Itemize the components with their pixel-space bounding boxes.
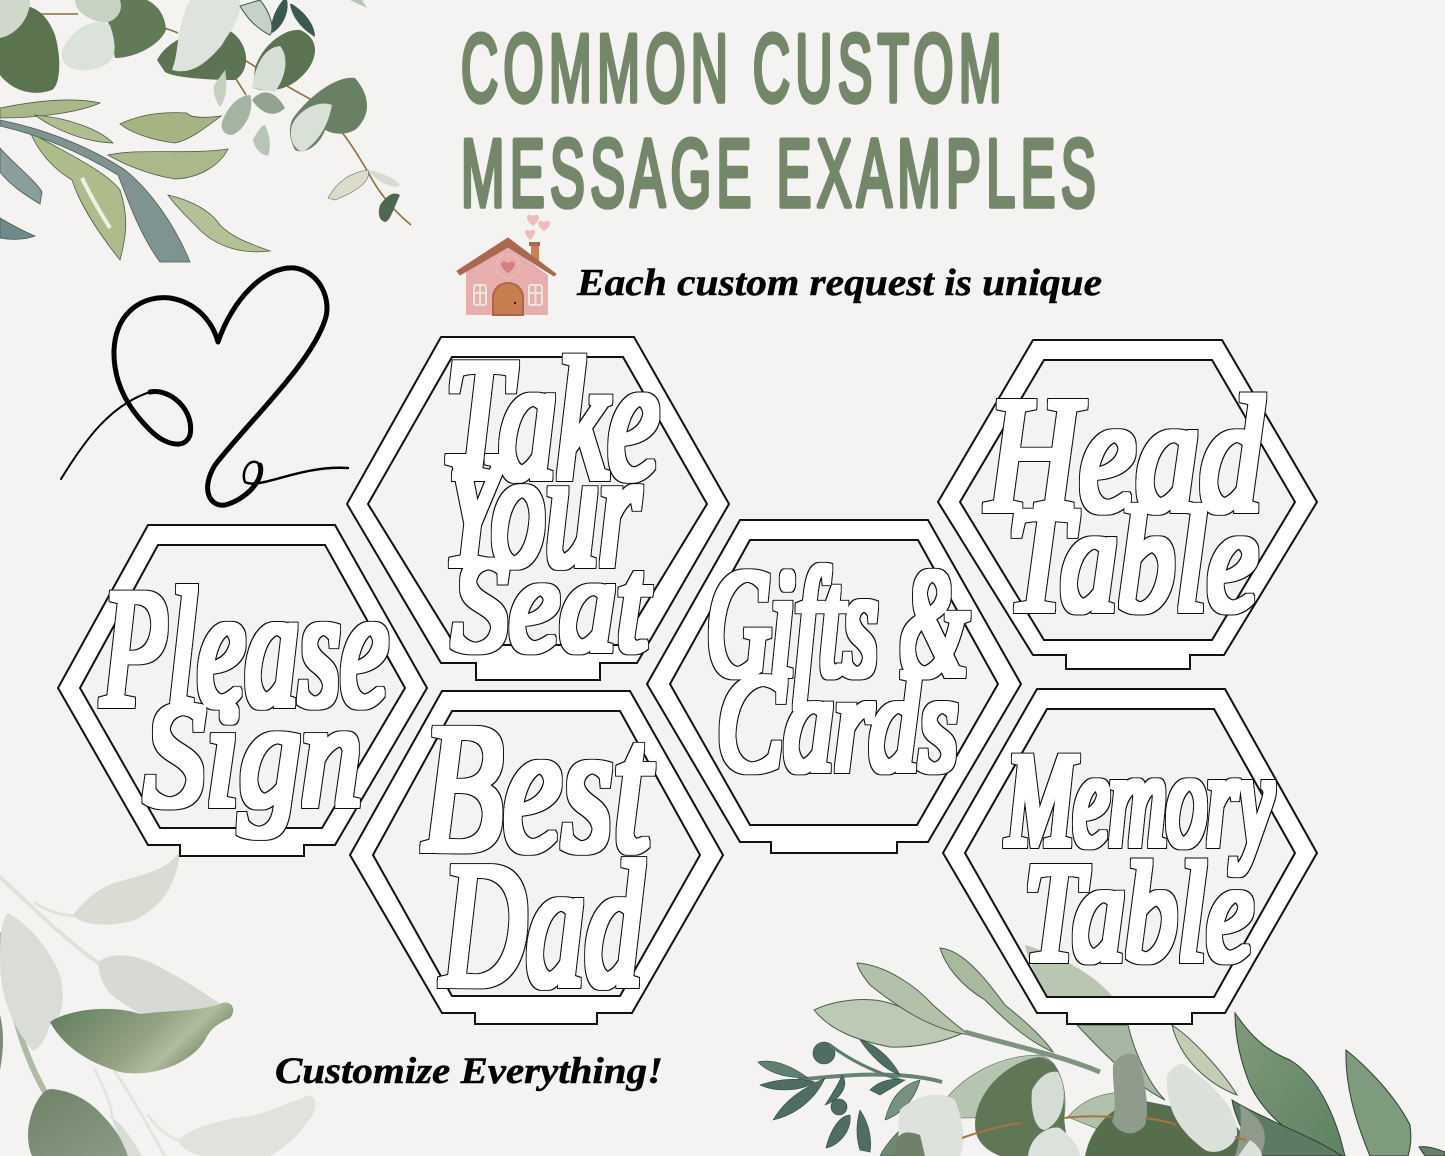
- script message: Head: [985, 363, 1263, 546]
- subtitle: each custom request: Each custom request is unique: [576, 262, 1102, 304]
- script message: Table: [1024, 833, 1253, 991]
- hexagon sign: Best Dad: [350, 686, 723, 1024]
- right green leaves: [1232, 1013, 1445, 1156]
- hexagon sign: Head Table: [938, 340, 1317, 669]
- dark green leaf: [50, 1002, 233, 1073]
- sprig: [758, 1040, 942, 1156]
- foliage: top-left eucalyptus and leaves: [0, 0, 411, 262]
- script message: Table: [1007, 477, 1258, 643]
- frame: [647, 520, 1021, 853]
- icon: black scribble heart: [61, 268, 348, 505]
- script message: Cards: [717, 646, 958, 801]
- frame: [350, 691, 723, 1024]
- script message: Your: [442, 418, 641, 601]
- caption: customize everything: Customize Everything!: [275, 1051, 663, 1092]
- frame: [943, 689, 1317, 1024]
- olive and blue-grey leaves: [0, 100, 270, 262]
- hexagon sign: Take Your Seat: [347, 322, 729, 680]
- frame: [58, 525, 427, 856]
- script message: Memory: [1006, 726, 1273, 875]
- script message: Best: [422, 686, 653, 891]
- hexagon sign: Memory Table: [943, 689, 1317, 1024]
- script message: Dad: [440, 825, 644, 1024]
- frame: [347, 337, 729, 680]
- script message: Please: [101, 554, 388, 742]
- script message: Gifts &: [707, 537, 968, 709]
- title: [461, 15, 1101, 227]
- hexagon sign: Gifts and Cards: [647, 520, 1021, 853]
- script message: Take: [445, 322, 659, 516]
- round eucalyptus leaves: [0, 5, 59, 93]
- frame: [938, 340, 1317, 669]
- stems: [0, 877, 178, 1156]
- stems: [30, 14, 411, 225]
- foliage: bottom-right eucalyptus and leaves: [758, 945, 1445, 1156]
- upper leaves: [814, 945, 1237, 1100]
- icon: pink house with hearts: [457, 215, 556, 315]
- foliage: bottom-left pale leaves: [0, 850, 315, 1156]
- hexagon sign: Please Sign: [58, 525, 427, 856]
- round eucalyptus cluster: [975, 1057, 1072, 1156]
- script message: Sign: [144, 672, 362, 838]
- script message: Seat: [452, 531, 651, 680]
